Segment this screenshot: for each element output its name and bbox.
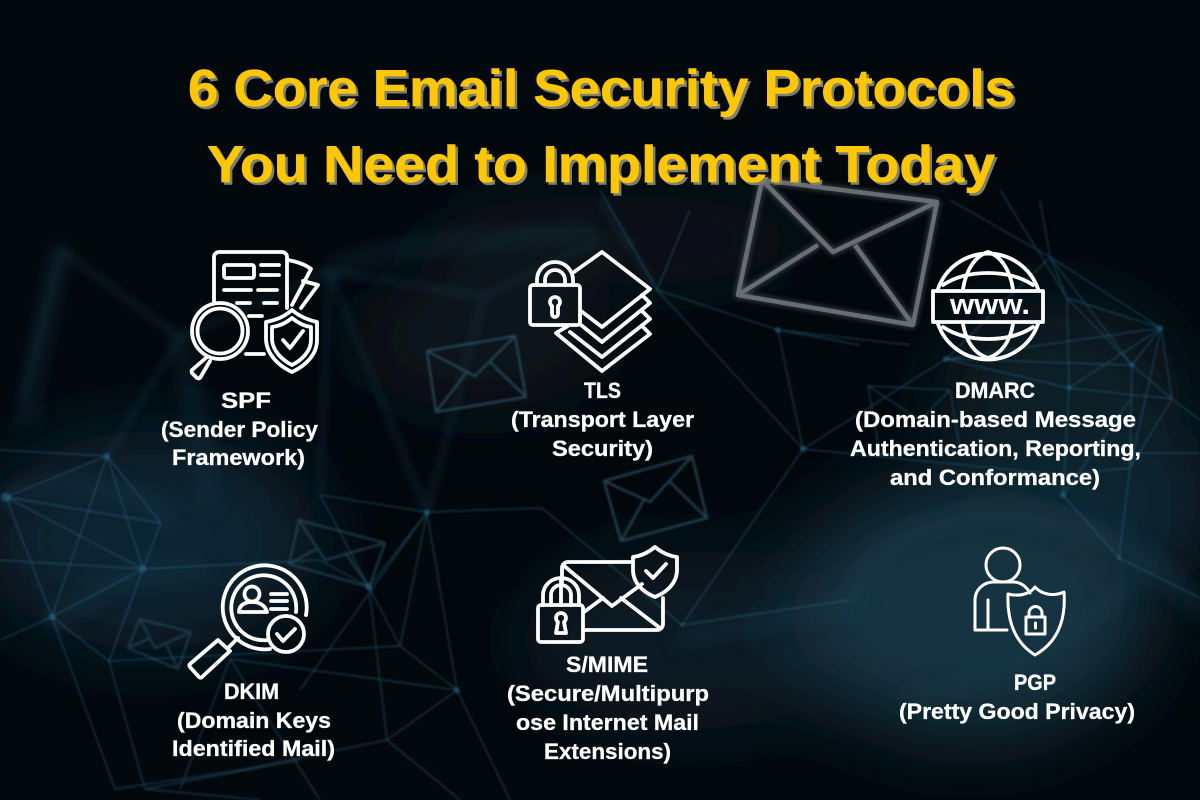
label: DKIM: DKIM (224, 679, 279, 704)
icon: padlock with stacked layers (530, 252, 650, 371)
label: DMARC: DMARC (955, 378, 1035, 403)
label: TLS: (Transport Layer (511, 407, 694, 432)
network nodes (1, 326, 1164, 693)
panel: DKIM (172, 565, 335, 761)
label: DKIM: Identified Mail) (172, 736, 335, 761)
label: TLS: TLS (584, 378, 621, 403)
icon: magnifier with identity and check (189, 565, 307, 678)
label: DMARC: (Domain-based Message (855, 407, 1136, 432)
blurred far network (23, 200, 657, 512)
panel: S/MIME (507, 547, 709, 764)
label: DMARC (850, 378, 1141, 490)
icon: person with shield and padlock (975, 548, 1064, 655)
icon: document with magnifier and shield (192, 252, 318, 378)
icon: globe with www banner (933, 252, 1043, 359)
title: 6 Core Email Security Protocols (188, 60, 1015, 118)
label: DMARC: and Conformance) (890, 465, 1100, 490)
label: DKIM (172, 679, 335, 761)
icon: globe with www banner: www. (949, 289, 1030, 321)
label: S/MIME: Extensions) (544, 739, 671, 764)
label: S/MIME (507, 652, 709, 764)
label: S/MIME: S/MIME (566, 652, 648, 677)
label: SPF: (Sender Policy (161, 417, 319, 442)
icon: envelope with padlock and shield (538, 547, 677, 642)
label: SPF (161, 388, 319, 470)
label: PGP (899, 670, 1135, 724)
soft cloud bands (0, 230, 1200, 700)
label: SPF: SPF (221, 388, 271, 413)
big envelope graphic (738, 180, 937, 325)
small background envelopes (128, 336, 707, 669)
label: S/MIME: (Secure/Multipurp (507, 681, 709, 706)
label: DMARC: Authentication, Reporting, (850, 436, 1141, 461)
panel: SPF (161, 252, 319, 470)
panel: PGP (899, 548, 1135, 724)
label: PGP: PGP (1014, 670, 1056, 695)
label: DKIM: (Domain Keys (177, 708, 331, 733)
label: SPF: Framework) (172, 445, 305, 470)
panel: TLS (511, 252, 694, 461)
label: TLS (511, 378, 694, 461)
title (188, 60, 1018, 196)
label: TLS: Security) (552, 436, 653, 461)
title: You Need to Implement Today (207, 136, 995, 194)
label: S/MIME: ose Internet Mail (516, 710, 699, 735)
title: 6 Core Email Security Protocols (190, 62, 1018, 120)
label: PGP: (Pretty Good Privacy) (899, 699, 1135, 724)
title: You Need to Implement Today (210, 138, 998, 196)
panel: DMARC (850, 252, 1141, 490)
network lines (0, 190, 1200, 800)
